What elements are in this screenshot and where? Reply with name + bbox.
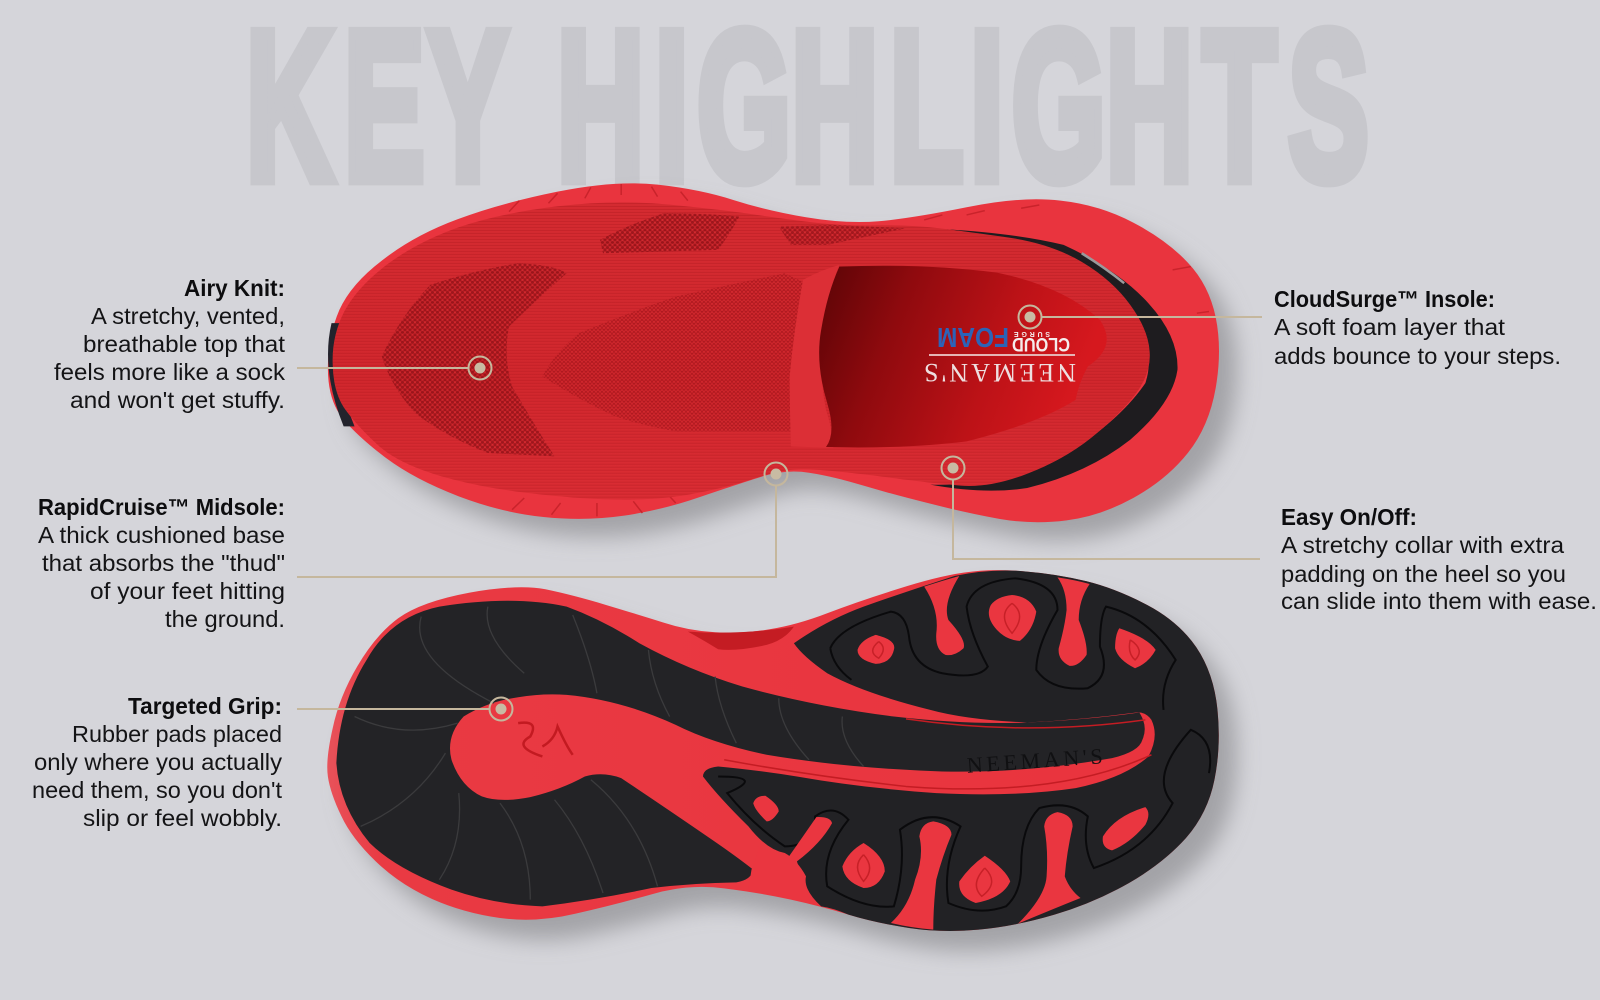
text: easy on/off: Easy On/Off: [1281,504,1417,530]
forefoot contour lines [718,578,1210,911]
logo: NEEMAN'S: NEEMAN'S [924,358,1076,387]
insole logo [924,322,1076,387]
text: easy on/off [1281,504,1597,614]
text: targeted grip: Rubber pads placed [72,721,282,747]
vented zone: vamp [542,273,806,431]
insole opening [819,266,1107,447]
ring highlight [1082,253,1124,283]
midsole rim [328,183,1219,522]
text: airy knit: breathable top that [83,331,286,357]
callout: rapidcruise [297,462,788,577]
text: rapidcruise midsole: that absorbs the "thud" [42,550,285,576]
text: targeted grip [32,693,283,831]
text: targeted grip: only where you actually [34,749,283,775]
callout: easy on/off [942,456,1260,559]
logo: divider [929,354,1075,356]
text: airy knit: and won't get stuffy. [70,387,285,413]
bottom view of shoe [327,570,1237,951]
toe tip black sliver [328,323,355,426]
callout: airy knit [297,356,492,380]
logo: surge: SURGE [1014,330,1050,337]
text: rapidcruise midsole: RapidCruise™ Midsole: [38,494,285,520]
shadow: bottom shoe [345,590,1237,951]
tread centre rings [858,603,1139,896]
callout: targeted grip [297,698,512,720]
vented zone: upper side [600,213,739,253]
sole brand text: NEEMAN'S [966,743,1103,778]
text: easy on/off: padding on the heel so you [1281,561,1566,587]
logo: foam: FOAM [937,322,1009,353]
text: airy knit: Airy Knit: [184,275,285,301]
text: airy knit: feels more like a sock [54,359,286,385]
logo: cloud: CLOUD [1012,333,1070,354]
text: easy on/off: A stretchy collar with extra [1281,532,1564,558]
shadow: top shoe [346,201,1237,540]
text: rapidcruise midsole: A thick cushioned base [38,522,285,548]
knit fine texture [333,202,1150,500]
knit upper [333,202,1150,500]
vented zone: collar side [779,225,906,245]
text: cloudsurge insole [1274,286,1561,369]
text: targeted grip: Targeted Grip: [128,693,282,719]
text: cloudsurge insole: CloudSurge™ Insole: [1274,286,1495,312]
text: airy knit: A stretchy, vented, [91,303,285,329]
tongue band [790,265,839,448]
vented zone: toe [382,263,567,456]
text: rapidcruise midsole [38,494,285,632]
text: rapidcruise midsole: of your feet hitting [90,578,285,604]
band highlight [724,719,1151,789]
callout: cloudsurge [1018,306,1262,328]
red tread: forefoot bottom [748,796,1148,930]
heel black ring [930,229,1178,491]
red tread: forefoot top [858,576,1156,668]
text: easy on/off: can slide into them with ease. [1281,588,1597,614]
text: cloudsurge insole: adds bounce to your steps. [1274,343,1561,369]
top view of shoe [328,183,1237,540]
text: targeted grip: slip or feel wobbly. [83,805,282,831]
outsole base [327,570,1219,931]
rim tread marks [509,184,1209,516]
text: rapidcruise midsole: the ground. [165,606,285,632]
heel contour lines [355,607,864,900]
text: airy knit [54,275,286,413]
brand mark [518,723,573,756]
callout lines and markers [297,306,1262,720]
shaded arch [688,627,794,650]
forefoot pad: black [703,570,1219,931]
text: targeted grip: need them, so you don't [32,777,283,803]
text: cloudsurge insole: A soft foam layer that [1274,314,1506,340]
heel pad: black [336,601,1145,906]
